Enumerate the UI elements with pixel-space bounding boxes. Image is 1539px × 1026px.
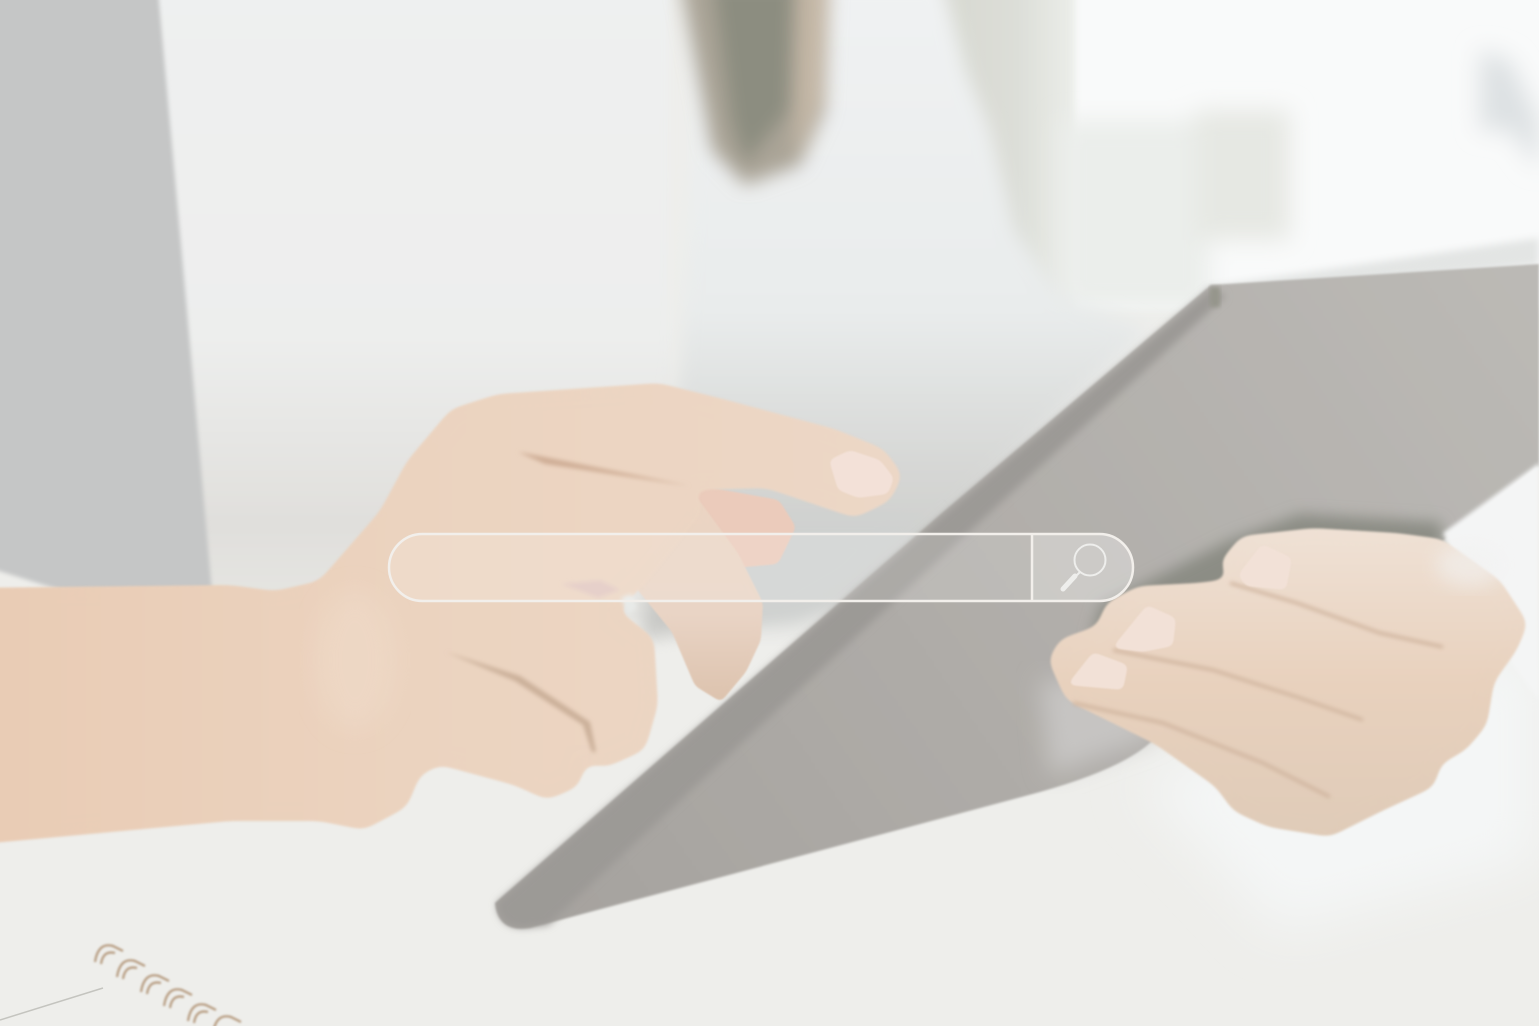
- window sill highlight above tablet: [1200, 238, 1539, 296]
- crease: fist: [446, 652, 596, 752]
- window area, top right: [930, 0, 1539, 320]
- hair: [680, 0, 830, 185]
- shadow beneath tablet: [1090, 514, 1445, 640]
- notebook spiral binding: [95, 945, 241, 1026]
- left arm and hand: [0, 383, 903, 846]
- notebook: [0, 945, 241, 1026]
- notebook rule line: [0, 988, 103, 1020]
- finger gap highlight: [562, 580, 620, 598]
- highlight near sleeve: [1436, 543, 1504, 587]
- search button tint: [1032, 534, 1133, 601]
- bright window: [1060, 0, 1539, 310]
- table light region, right: [1140, 640, 1539, 930]
- search field outline: [389, 534, 1133, 601]
- crease: index finger underside: [518, 452, 690, 486]
- shading under the sleeve, behind hand: [680, 520, 930, 625]
- tablet corner nub: [1210, 287, 1220, 307]
- middle fingertip: [680, 482, 796, 568]
- table surface: [0, 640, 1539, 1026]
- blurred background objects: [1060, 50, 1539, 310]
- window column: [930, 0, 1075, 320]
- tablet back: [495, 264, 1539, 929]
- hand and arm: [0, 383, 903, 846]
- grey cardigan, left side: [0, 0, 212, 592]
- search bar: [389, 534, 1133, 601]
- lighter lower tablet corner: [1040, 680, 1160, 775]
- soft hand highlight: [315, 590, 395, 730]
- tablet: [495, 238, 1539, 929]
- light gap between fingers: [621, 594, 637, 614]
- curled finger: [632, 480, 763, 702]
- fingernails: [1067, 544, 1292, 690]
- icon: magnifying glass: [1063, 544, 1106, 589]
- search divider: [1031, 534, 1033, 601]
- right hand: [1048, 528, 1528, 837]
- nail: index finger: [829, 450, 894, 498]
- white ribbed top: [150, 0, 670, 620]
- hair: light strand: [795, 0, 830, 160]
- sleeve, right side: [640, 0, 1150, 640]
- palm and fingers: [1048, 528, 1528, 837]
- search field fill: [389, 534, 1133, 601]
- hair: grey-brown edge: [680, 0, 830, 185]
- tablet side band: [497, 288, 1226, 928]
- white sleeve at far right: [1443, 463, 1539, 700]
- hair: dark strand: [712, 0, 795, 165]
- finger creases: [1073, 583, 1443, 797]
